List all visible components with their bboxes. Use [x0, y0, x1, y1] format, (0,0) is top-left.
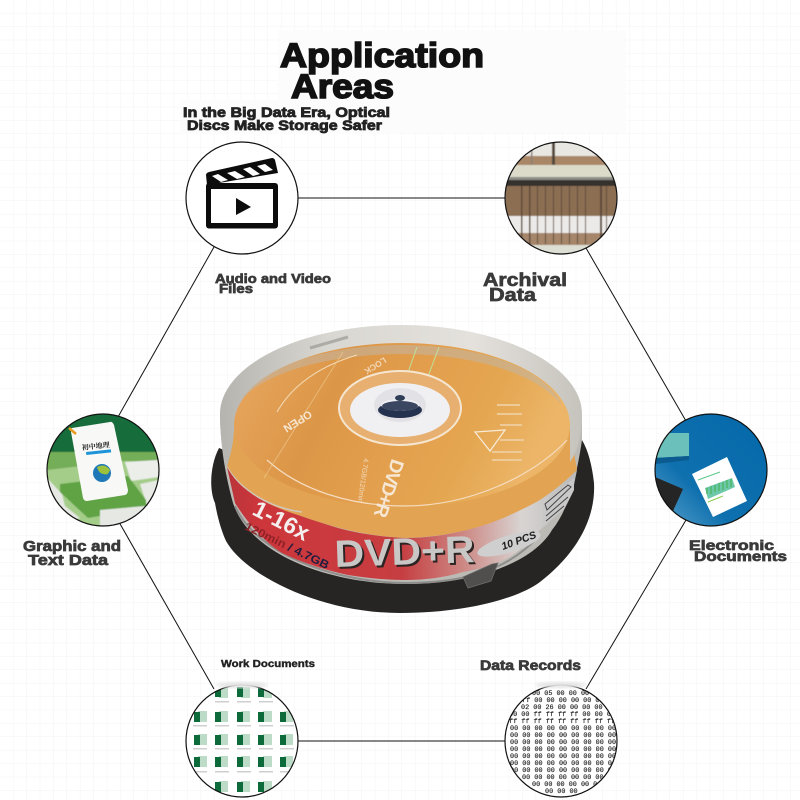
hub	[339, 371, 461, 445]
orange disc side	[227, 430, 577, 538]
printed text on disc: OPEN	[281, 407, 314, 434]
label: audio and video files: Files	[219, 281, 253, 296]
label: electronic documents: Electronic	[689, 538, 775, 553]
thumbnail: hex data records: ff 00 00 00 00 00 01	[522, 697, 604, 705]
subtitle: In the Big Data Era, Optical	[183, 104, 390, 120]
thumbnail: graphic and text data: 初中地理	[81, 440, 110, 452]
subtitle: Discs Make Storage Safer	[187, 117, 383, 133]
label: archival data: Archival	[483, 269, 567, 290]
thumbnail: hex data records: 00 00 00 00 00 00 00 00 00 0	[510, 746, 624, 754]
thumbnail: hex data records: 00 05 00 00 00 00	[532, 690, 601, 698]
label: data records: Data Records	[480, 658, 581, 673]
spindle tab	[463, 563, 498, 588]
thumbnail: hex data records: 00 00 00 00 00 00 00 00	[522, 774, 616, 782]
thumbnail: spreadsheet file icons	[186, 685, 298, 797]
red label band	[227, 467, 577, 580]
thumbnail: hex data records: 00 00 00 00 00 00 00 00 00 0	[510, 725, 624, 733]
thumbnail: archival data shelves	[505, 142, 617, 255]
label: archival data	[483, 269, 567, 305]
thumbnail: hex data records: 00 00 00 00 00 00 00 00 00 0	[510, 739, 624, 747]
label: audio and video files: Audio and Video	[215, 271, 331, 286]
thumbnail: hex data records: 00 00 ff ff ff ff 00 00 00	[509, 711, 615, 719]
electronic circle outline	[655, 414, 767, 526]
printed text on disc: DVD+R	[369, 456, 407, 520]
DVD+R disc spindle product: 10 PCS	[500, 529, 538, 553]
DVD+R disc spindle product	[211, 325, 594, 613]
icon: audio and video clapperboard	[186, 142, 298, 254]
thumbnail: electronic documents	[655, 414, 767, 526]
DVD+R disc spindle product: DVD+R	[334, 529, 475, 576]
printed text on disc: 4.7GB/120min	[356, 458, 369, 503]
thumbnail: hex data records: ff ff ff ff ff ff ff ff ff	[509, 718, 615, 726]
thumbnail: hex data records: 00 00 00 00 00 0	[532, 781, 597, 789]
label: graphic and text data	[23, 539, 121, 569]
report page	[692, 457, 747, 517]
hex circle outline	[505, 685, 617, 797]
orange disc top	[234, 343, 570, 507]
label: graphic and text data: Graphic and	[23, 539, 121, 555]
thumbnail: hex data records: 00 00 00 00 00 00 00 00 00 0	[510, 732, 624, 740]
label: graphic and text data: Text Data	[28, 553, 109, 569]
clear case body	[220, 414, 582, 584]
thumbnail: hex data records: 00 00 00 00 00 00 00 00 00 0	[510, 760, 624, 768]
thumbnail: hex data records: 00 00 00 00 00 00 00 00 00 0	[510, 753, 624, 761]
spreadsheet circle outline	[186, 685, 298, 797]
DVD+R disc spindle product: DVD+R	[336, 531, 477, 578]
printed text on disc	[281, 355, 407, 520]
archival circle outline	[505, 142, 617, 254]
connecting hexagon lines	[118, 198, 686, 741]
DVD+R disc spindle product: 120min / 4.7GB	[243, 521, 331, 572]
title: Application	[280, 37, 484, 75]
label: archival data: Data	[489, 284, 537, 305]
subtitle	[183, 104, 390, 133]
thumbnail: hex data records: 00 00 00	[545, 788, 578, 796]
label: electronic documents	[689, 538, 787, 564]
label: audio and video files	[215, 271, 331, 296]
case lid rim	[220, 325, 582, 467]
label text on band: 1-16x	[249, 495, 314, 546]
thumbnail: graphic and text data	[47, 414, 159, 527]
printed text on disc: LOCK	[362, 355, 388, 377]
title: Areas	[291, 68, 394, 106]
label: work documents: Work Documents	[221, 659, 315, 670]
thumbnail: hex data records: 00 00 00 00 00 00 00 00 00	[510, 767, 616, 775]
thumbnail: hex data records	[506, 689, 616, 795]
notebook card	[71, 422, 128, 501]
title	[280, 37, 484, 106]
graphic circle outline	[47, 414, 159, 526]
inner lid shadow	[241, 345, 562, 405]
label: electronic documents: Documents	[694, 549, 787, 564]
black spindle base	[211, 440, 594, 613]
thumbnail: hex data records: 02 00 26 00 00 00 00 00	[521, 704, 615, 712]
